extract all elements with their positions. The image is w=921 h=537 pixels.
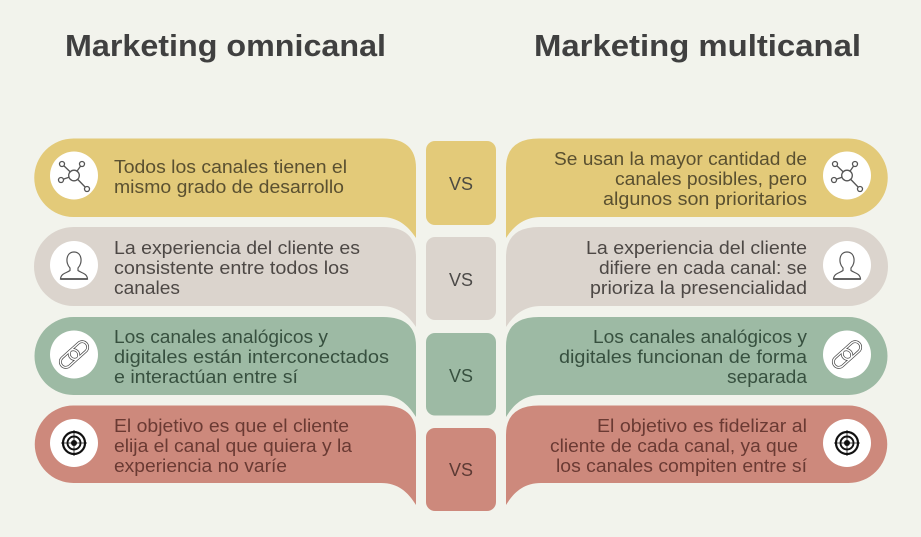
row 1 right: development: canales posibles, pero [615, 169, 807, 189]
panel: left column, omnichannel [34, 138, 416, 505]
row 3 right: channel connection: Los canales analógicos y [593, 327, 807, 347]
VS badge 1: VS [449, 174, 473, 194]
panel: right column, multichannel [506, 138, 888, 505]
row 3 right: channel connection: digitales funcionan de forma [559, 347, 808, 367]
row 4 left: objective: elija el canal que quiera y la [114, 436, 353, 456]
row 1 left: development: Todos los canales tienen el [114, 157, 347, 177]
row 4 right: objective: El objetivo es fidelizar al [597, 416, 807, 436]
title: Marketing omnicanal: Marketing omnicanal [65, 28, 386, 63]
row 3 right: channel connection [506, 317, 888, 417]
row 2 right: customer experience [506, 227, 888, 327]
row 4 left: objective: El objetivo es que el cliente [114, 416, 349, 436]
title: Marketing multicanal: Marketing multicanal [534, 28, 861, 63]
VS badge 2: VS [449, 270, 473, 290]
row 3 right: channel connection: separada [727, 367, 808, 387]
row 3 left: channel connection [34, 317, 416, 417]
row 4 left: objective: experiencia no varíe [114, 456, 287, 476]
row 2 left: customer experience [34, 227, 416, 327]
row 3 left: channel connection: digitales están interconectados [114, 347, 389, 367]
row 2 left: customer experience: canales [114, 278, 180, 298]
VS badge 3: VS [449, 366, 473, 386]
row 1 right: development: algunos son prioritarios [603, 189, 807, 209]
row 2 right: customer experience: La experiencia del cliente [586, 238, 807, 258]
row 2 right: customer experience: difiere en cada canal: se [599, 258, 807, 278]
row 2 right: customer experience: prioriza la presencialidad [590, 278, 807, 298]
panel: center VS badges [426, 141, 496, 511]
row 1 left: development: mismo grado de desarrollo [114, 177, 344, 197]
row 3 left: channel connection: Los canales analógicos y [114, 327, 328, 347]
row 4 right: objective: cliente de cada canal, ya que [550, 436, 798, 456]
row 2 left: customer experience: consistente entre todos los [114, 258, 349, 278]
row 1 right: development [506, 138, 888, 238]
VS badge 1 [426, 141, 496, 225]
row 1 right: development: Se usan la mayor cantidad de [554, 149, 807, 169]
VS badge 4 [426, 428, 496, 511]
row 4 right: objective: los canales compiten entre sí [556, 456, 807, 476]
row 4 right: objective [506, 406, 887, 505]
VS badge 3 [426, 333, 496, 416]
row 2 left: customer experience: La experiencia del cliente es [114, 238, 360, 258]
VS badge 4: VS [449, 460, 473, 480]
row 1 left: development [34, 138, 416, 238]
VS badge 2 [426, 237, 496, 320]
row 4 left: objective [35, 406, 416, 505]
row 3 left: channel connection: e interactúan entre sí [114, 367, 298, 387]
